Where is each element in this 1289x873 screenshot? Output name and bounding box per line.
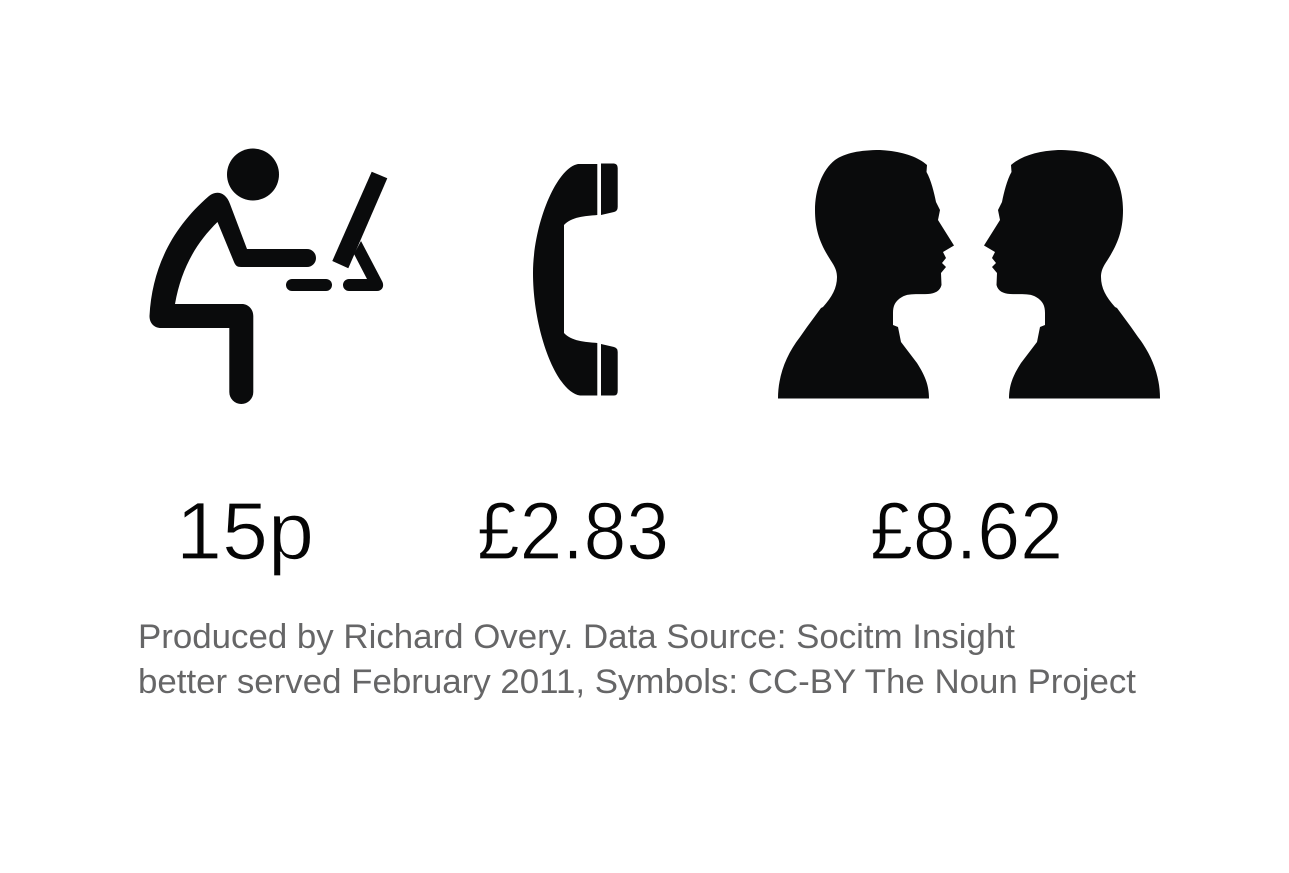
value: face to face cost: £8.62 [870,486,1063,577]
credits line 2: better served February 2011, Symbols: CC-BY The Noun Project [138,663,1137,701]
handset body [533,164,597,396]
person head [227,148,279,200]
monitor screen [332,172,387,268]
icon: telephone handset [533,164,618,396]
icon: person at computer [150,148,387,404]
credits text [138,618,1137,701]
value: phone cost: £2.83 [477,486,669,577]
credits line 1: Produced by Richard Overy. Data Source: Socitm Insight [138,618,1016,656]
person body [150,193,316,404]
value: online cost: 15p [176,486,314,577]
keyboard [286,279,332,291]
earpiece [601,164,618,215]
right head silhouette [984,150,1160,398]
left head silhouette [778,150,954,398]
mouthpiece [601,344,618,396]
icon: two heads face to face [778,150,1160,398]
monitor stand [343,241,383,291]
